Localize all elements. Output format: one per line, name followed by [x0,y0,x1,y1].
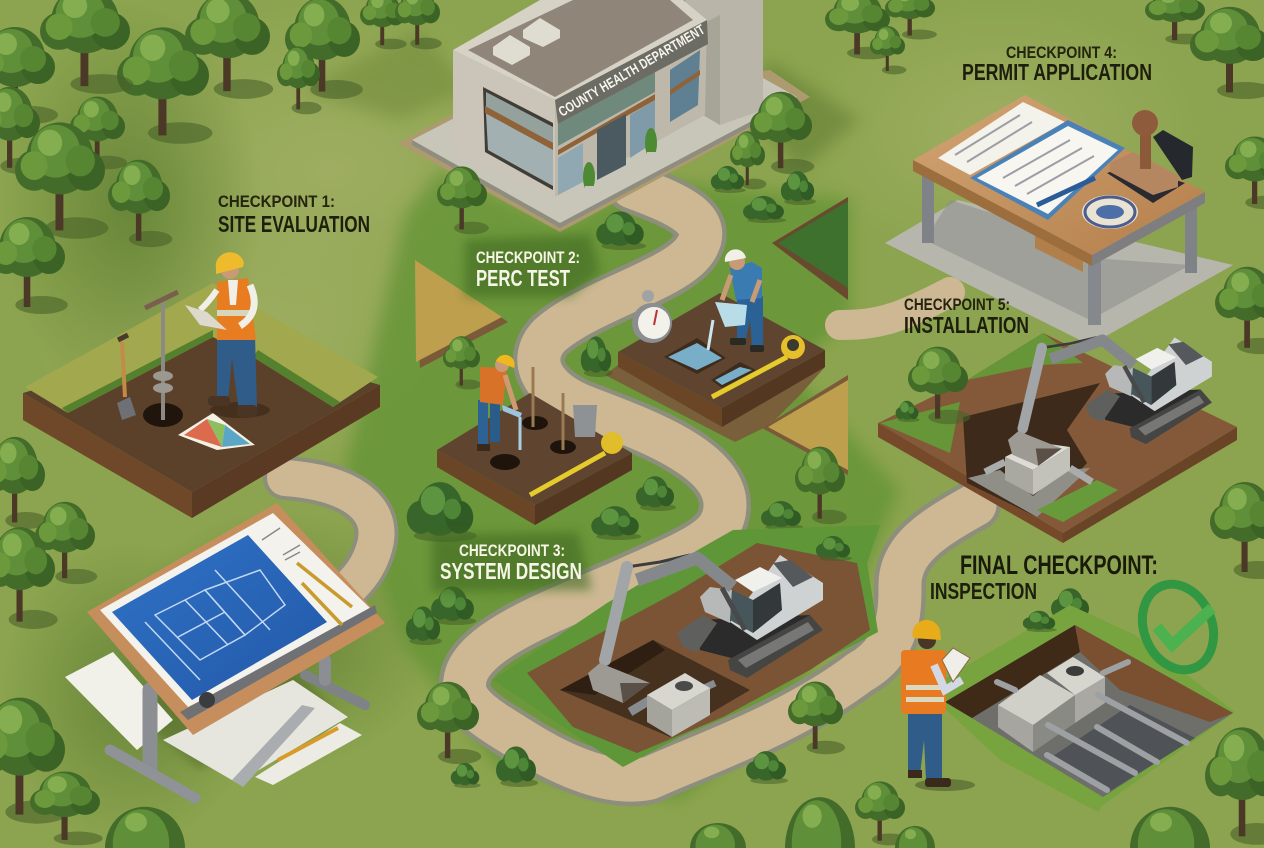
bucket [573,405,597,437]
panel: site evaluation soil platform [23,252,380,518]
excavator [1008,337,1212,466]
heading: checkpoint 1 site evaluation [218,192,370,237]
concrete tanks [998,657,1105,752]
panel: perc test hole platform [437,355,632,525]
scattered plans [65,652,362,787]
worker with plans [185,252,270,418]
crop fields [415,197,848,475]
heading: checkpoint 5 installation [904,295,1029,338]
shrubs by the pit [1023,611,1057,632]
worker with beaker [708,249,764,352]
path: gravel route between checkpoints [285,187,975,780]
tree [908,347,970,424]
heading: final checkpoint inspection [930,550,1158,604]
official seal [1082,195,1138,229]
building: county health department [398,0,810,232]
heading: checkpoint 4 permit application: PERMIT APPLICATION [962,59,1152,85]
check mark badge [1130,573,1226,681]
stopwatch [632,290,672,343]
trees and shrubs near the building [406,92,1091,788]
panel: permit application desk [885,95,1233,345]
planters [583,128,657,196]
panel: drafting table with blueprint [65,503,385,798]
heading: checkpoint 1 site evaluation: CHECKPOINT 1: [218,192,335,211]
septic tank [630,673,715,737]
heading: checkpoint 4 permit application: CHECKPOINT 4: [1006,43,1117,62]
heading: checkpoint 2 perc test: CHECKPOINT 2: [476,248,580,267]
rubber stamp and ink pad [1107,110,1193,203]
heading: checkpoint 4 permit application [962,43,1152,85]
heading: checkpoint 3 system design: SYSTEM DESIGN [440,558,582,584]
heading: checkpoint 3 system design [432,532,592,592]
heading: final checkpoint inspection: INSPECTION [930,578,1037,604]
heading: checkpoint 2 perc test [465,235,600,297]
drain field mesh [1050,705,1195,793]
inspector with clipboard [901,620,975,791]
drain pipes [997,662,1187,790]
tape measure [530,432,623,495]
heading: checkpoint 1 site evaluation: SITE EVALUATION [218,211,370,237]
panel: system design excavation site [493,525,880,767]
rooftop air conditioning units [493,18,560,65]
soil color chart [178,413,255,450]
heading: checkpoint 5 installation: CHECKPOINT 5: [904,295,1010,314]
heading: final checkpoint inspection: FINAL CHECKPOINT: [960,550,1158,580]
panel: perc test water trench platform [618,249,825,427]
application papers [938,102,1125,220]
worker pouring water [477,355,522,451]
panel: installation excavation platform [878,333,1237,543]
heading: checkpoint 5 installation: INSTALLATION [904,312,1029,338]
pencils [297,563,352,625]
septic tank [985,442,1092,495]
heading: checkpoint 3 system design: CHECKPOINT 3: [459,541,565,560]
tape measure [712,335,805,397]
heading: checkpoint 2 perc test: PERC TEST [476,265,570,291]
auger and shovel tools [117,292,178,420]
table stand [110,660,365,798]
excavator [588,555,823,703]
panel: final inspection open pit [901,573,1235,812]
